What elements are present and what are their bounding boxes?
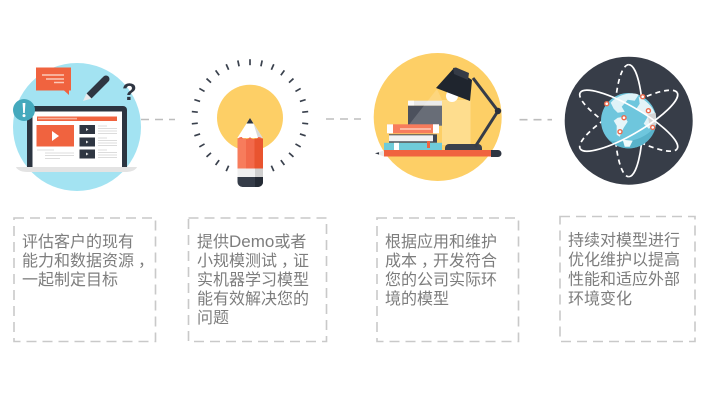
dark disc [565, 57, 693, 185]
icon: globe with orbits [565, 57, 693, 185]
panel: step 2 [188, 218, 326, 342]
text: step 4 description: 性能和适应外部 [568, 270, 680, 288]
text: step 2 description: 问题 [197, 309, 229, 327]
vertical orbit solid half [629, 65, 643, 177]
icon: question mark: ? [122, 79, 137, 106]
panel: step 4 [560, 216, 695, 342]
text: step 4 description: 持续对模型进行 [568, 232, 680, 250]
text: step 3 description [385, 232, 497, 308]
sun rays [192, 59, 308, 171]
icon: desk lamp and books [374, 53, 502, 181]
icon: pencil [83, 79, 106, 101]
icon: exclamation badge [13, 99, 35, 121]
text: step 1 description: 能力和数据资源， [22, 252, 154, 270]
text: step 2 description: 能有效解决您的 [197, 290, 309, 308]
text: step 3 description: 根据应用和维护 [385, 232, 497, 251]
text: step 2 description: 提供Demo或者 [197, 232, 306, 251]
text: step 1 description: 一起制定目标 [22, 271, 118, 289]
light column [442, 100, 470, 145]
icon: pencil with sun [192, 59, 308, 187]
dark upright book [408, 101, 442, 126]
icon: orange speech bubble [36, 68, 71, 95]
panel: step 1 [14, 218, 156, 342]
text: step 3 description: 境的模型 [385, 289, 449, 308]
text: step 3 description: 您的公司实际环 [385, 271, 497, 289]
laptop base [16, 167, 137, 172]
panel: step 3 [377, 218, 518, 342]
icon: laptop on blue circle [13, 63, 141, 191]
desk lamp [436, 68, 501, 150]
text: step 3 description: 成本，开发符合 [385, 252, 497, 270]
sun disc [217, 85, 283, 151]
connector 1 [141, 118, 175, 120]
text: step 4 description [568, 232, 680, 308]
globe [601, 93, 656, 148]
text: step 1 description [22, 233, 154, 289]
dashed orbits behind globe [573, 65, 677, 177]
solid orbits over globe [580, 81, 684, 161]
text: step 4 description: 环境变化 [568, 289, 632, 308]
pencil [237, 118, 263, 187]
shelf pencil [375, 150, 502, 157]
text: step 4 description: 优化维护以提高 [568, 251, 680, 269]
connector 3 [520, 119, 552, 121]
text: step 2 description [197, 232, 309, 327]
text: step 2 description: 实机器学习模型 [197, 271, 309, 289]
light cone over book [408, 89, 442, 126]
book stack [384, 124, 442, 150]
text: step 1 description: 评估客户的现有 [22, 233, 134, 251]
location pins [605, 95, 655, 134]
connector 2 [326, 118, 361, 120]
laptop screen [27, 106, 127, 167]
text: step 2 description: 小规模测试，证 [197, 252, 309, 270]
